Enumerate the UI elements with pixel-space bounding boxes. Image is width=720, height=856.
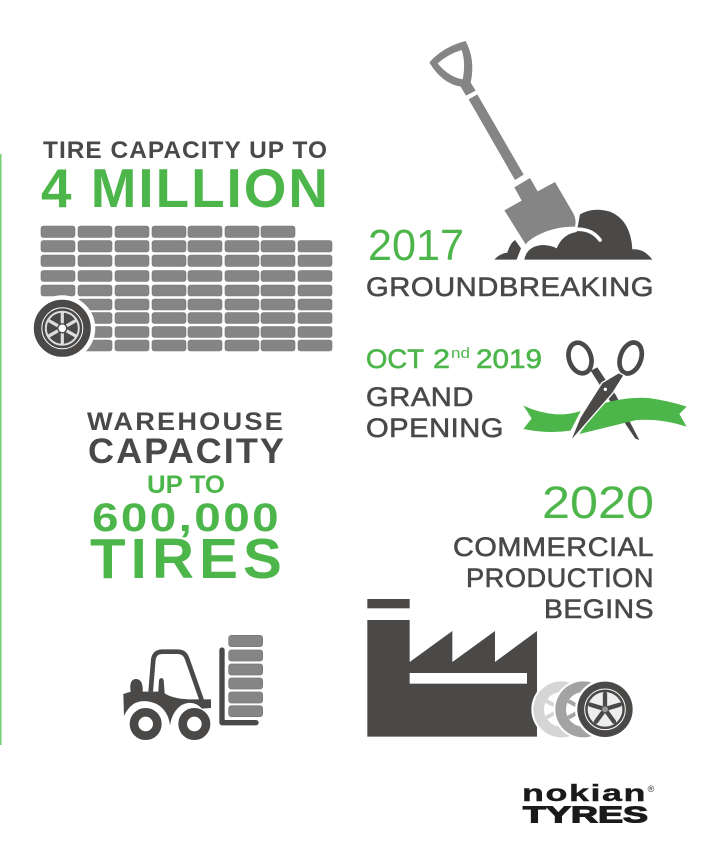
heading: warehouse capacity: CAPACITY [88, 432, 286, 471]
heading: up to 600,000 tires: TIRES [90, 527, 287, 591]
label: commercial production begins: COMMERCIAL [453, 532, 654, 562]
forklift mast [222, 650, 256, 723]
forklift wheels [134, 712, 206, 736]
date: oct 2nd 2019: 2019 [476, 344, 542, 374]
chart: stacked tires grid [41, 226, 332, 351]
logo: nokian tyres: TYRES [523, 802, 648, 828]
heading: tire capacity up to: TIRE CAPACITY UP TO [43, 137, 328, 164]
label: grand opening: OPENING [366, 413, 504, 443]
panel: 2020 commercial production [367, 477, 654, 739]
label: commercial production begins: BEGINS [544, 594, 654, 624]
factory window [410, 673, 527, 684]
label: groundbreaking: GROUNDBREAKING [366, 272, 654, 302]
factory chimney cap [367, 599, 410, 608]
shovel blade [504, 178, 576, 244]
scissors back blade [591, 367, 639, 440]
panel: tire capacity [29, 137, 332, 361]
panel: grand opening [366, 339, 687, 443]
tire: light [531, 679, 591, 739]
scissors front blade [571, 373, 624, 439]
forklift body [123, 678, 211, 725]
forklift tire stack [229, 635, 263, 717]
shovel handle [429, 41, 476, 96]
logo: nokian tyres: ® [648, 784, 655, 794]
label: grand opening [366, 382, 504, 443]
factory building [367, 620, 537, 737]
date: oct 2nd 2019: 2 [433, 344, 450, 374]
year: 2020: 2020 [542, 477, 654, 528]
heading: 4 million: 4 MILLION [41, 157, 330, 219]
heading: up to 600,000 tires: UP TO [147, 471, 225, 499]
icon: factory with tires [367, 599, 635, 739]
icon: tire [29, 295, 95, 361]
forklift cab [151, 652, 202, 700]
tire: dark [575, 679, 635, 739]
date: oct 2nd 2019 [366, 344, 542, 374]
label: commercial production begins [453, 532, 654, 624]
panel: 2017 groundbreaking [366, 41, 654, 302]
icon: forklift with tires [123, 635, 263, 736]
date: oct 2nd 2019: OCT [366, 344, 424, 374]
tire: medium [553, 679, 613, 739]
date: oct 2nd 2019: nd [451, 345, 470, 362]
logo: nokian tyres: nokian [522, 780, 647, 806]
year: 2017: 2017 [368, 221, 464, 270]
shovel shaft [469, 94, 524, 180]
heading: up to 600,000 tires [90, 471, 287, 591]
heading: warehouse capacity [87, 408, 286, 471]
ribbon right piece [579, 398, 687, 434]
ribbon left piece [523, 406, 581, 432]
heading: up to 600,000 tires: 600,000 [92, 496, 281, 540]
dirt small pile [494, 240, 521, 260]
label: grand opening: GRAND [366, 382, 474, 412]
logo: nokian tyres [522, 780, 655, 828]
label: commercial production begins: PRODUCTION [466, 563, 654, 593]
heading: warehouse capacity: WAREHOUSE [87, 408, 285, 436]
panel: warehouse capacity [87, 408, 287, 736]
icon: scissors cutting ribbon [523, 339, 687, 440]
dirt mound [524, 210, 652, 260]
scissors handles [565, 339, 646, 377]
icon: shovel in dirt [429, 41, 652, 260]
